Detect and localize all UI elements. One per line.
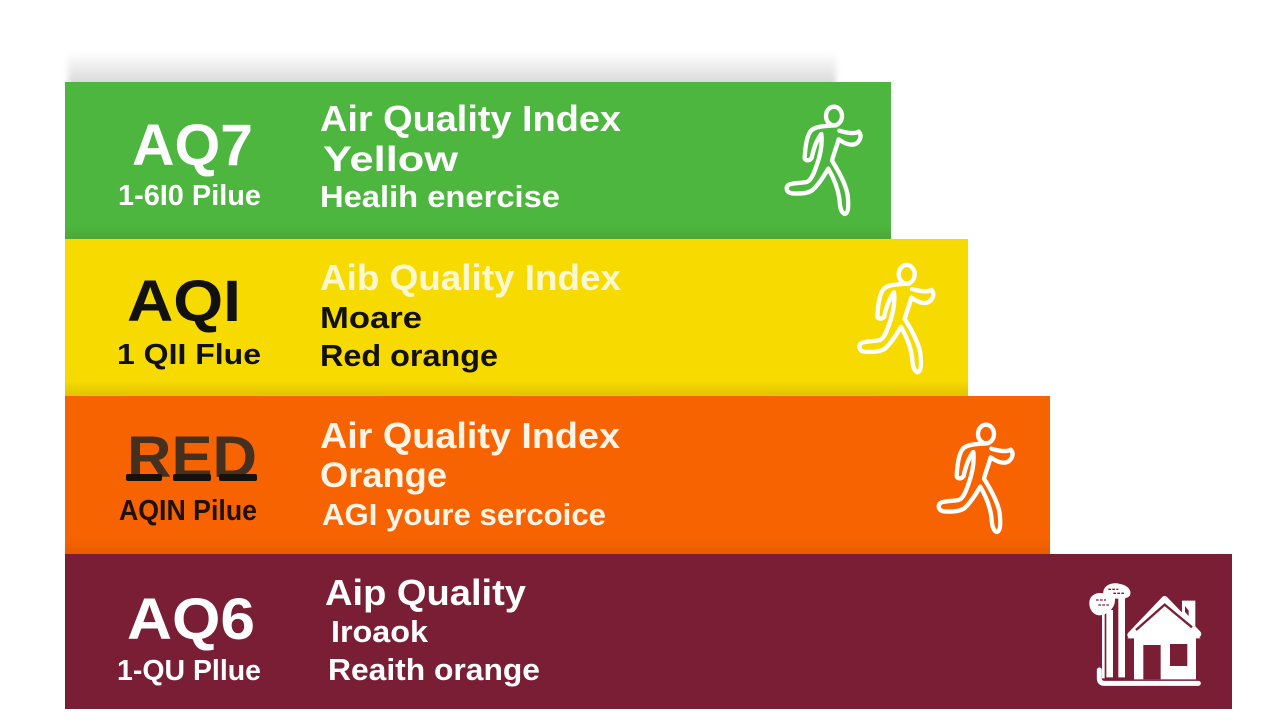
chimney slit <box>1185 606 1189 616</box>
maroon description: Reaith orange <box>328 652 540 687</box>
green description: Healih enercise <box>320 179 560 214</box>
yellow bar background <box>65 239 968 396</box>
yellow description: Red orange <box>320 338 498 373</box>
icon: runner green <box>787 107 861 214</box>
yellow description: Aib Quality Index <box>320 257 621 298</box>
slab serifs under RED <box>126 474 257 481</box>
maroon description: Iroaok <box>331 614 429 649</box>
maroon label <box>117 587 261 687</box>
shadow above top bar <box>68 52 836 88</box>
yellow label: 1 QII Flue <box>117 339 261 371</box>
smokestack thick columns <box>1110 597 1122 677</box>
orange description: AGI youre sercoice <box>322 497 606 532</box>
chimney <box>1182 601 1195 630</box>
smoke clouds <box>1089 583 1131 615</box>
icon: house with smokestacks <box>1089 583 1201 683</box>
orange description <box>320 415 620 532</box>
maroon description <box>325 572 540 687</box>
maroon label: 1-QU Pllue <box>117 655 261 687</box>
panel: yellow band <box>65 239 968 396</box>
maroon label: AQ6 <box>127 587 255 652</box>
orange bar lower shade <box>65 538 1050 554</box>
yellow label <box>117 269 261 371</box>
smoke cloud details <box>1096 589 1125 605</box>
yellow bar lower shade <box>65 380 968 396</box>
green description: Yellow <box>323 140 459 179</box>
panel: maroon band <box>65 554 1232 709</box>
smokestacks <box>1099 612 1107 678</box>
green description: Air Quality Index <box>320 98 621 139</box>
orange label: RED <box>127 425 257 490</box>
orange label <box>119 425 257 527</box>
green label: 1-6I0 Pilue <box>118 180 261 212</box>
window <box>1170 644 1187 666</box>
panel: orange band <box>65 396 1050 554</box>
maroon bar background <box>65 554 1232 709</box>
icon: runner yellow <box>859 265 933 372</box>
panel: green band <box>65 82 891 239</box>
ground line <box>1099 670 1198 683</box>
icon: runner orange <box>939 425 1013 532</box>
house body <box>1127 605 1201 679</box>
orange description: Air Quality Index <box>320 415 620 456</box>
orange bar background <box>65 396 1050 554</box>
green description <box>320 98 621 214</box>
green label: AQ7 <box>132 113 253 178</box>
yellow description: Moare <box>320 300 422 335</box>
maroon description: Aip Quality <box>325 572 526 613</box>
roof gap line <box>1136 605 1192 630</box>
door <box>1143 645 1161 679</box>
green bar lower shade <box>65 226 891 239</box>
yellow description <box>320 257 621 373</box>
green bar background <box>65 82 891 239</box>
orange description: Orange <box>320 456 447 495</box>
yellow label: AQI <box>127 269 241 334</box>
green label <box>118 113 261 212</box>
orange label: AQIN Pilue <box>119 495 257 527</box>
roof <box>1131 599 1198 635</box>
